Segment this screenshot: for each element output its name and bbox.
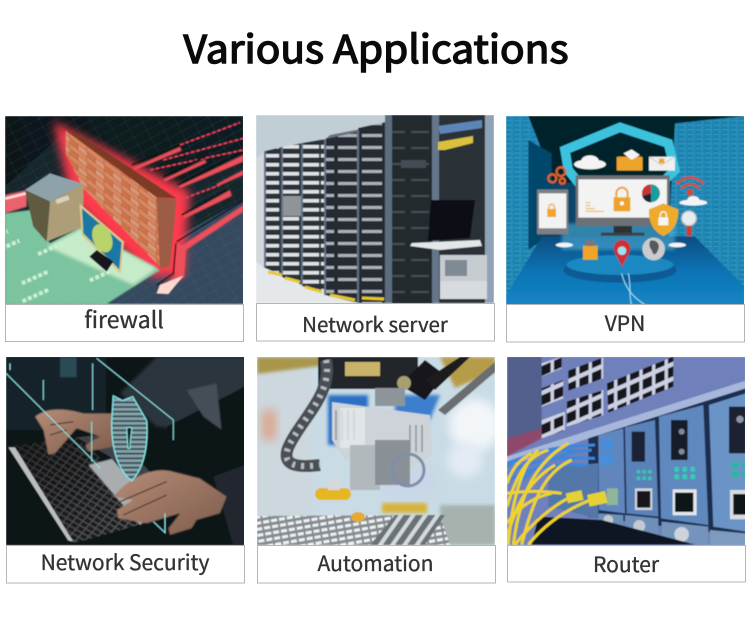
tablet — [537, 189, 568, 234]
network server caption — [256, 304, 494, 341]
brick wall — [66, 131, 160, 267]
automation caption — [258, 546, 496, 583]
network security caption: Network Security — [41, 547, 209, 577]
panel: network security — [6, 357, 245, 583]
shield outline — [565, 127, 675, 187]
monitor — [79, 203, 124, 274]
port blocks — [542, 357, 562, 377]
firewall caption: firewall — [84, 301, 164, 335]
router caption — [508, 546, 746, 582]
automation caption: Automation — [318, 548, 433, 578]
cable — [287, 360, 327, 466]
robot body — [332, 402, 432, 468]
gold shield — [649, 203, 678, 236]
dark base — [532, 517, 695, 545]
firewall caption — [6, 301, 244, 342]
VPN caption: VPN — [605, 308, 645, 338]
gripper — [315, 488, 351, 500]
panel: firewall — [0, 116, 244, 342]
connectors — [632, 432, 645, 462]
panel: VPN — [506, 116, 745, 342]
conveyor — [257, 515, 450, 545]
red arrows — [133, 147, 243, 293]
VPN image — [506, 116, 745, 305]
network server image — [256, 115, 494, 308]
network server caption: Network server — [302, 308, 448, 338]
holographic lines — [6, 358, 173, 533]
router image — [507, 357, 747, 545]
network security caption — [6, 546, 244, 583]
yellow fibres — [507, 443, 595, 545]
modules — [588, 388, 746, 537]
blue fibres — [507, 445, 595, 490]
holographic shield — [112, 396, 147, 481]
clouds, folder, mail — [574, 159, 606, 169]
top mechanism — [318, 357, 418, 389]
lower modules behind cables — [548, 463, 598, 518]
hands — [35, 409, 113, 455]
firewall image — [0, 116, 244, 309]
laptop — [8, 436, 143, 543]
panel: network server — [256, 115, 494, 341]
glow behind wall — [53, 122, 190, 277]
panel: automation — [257, 357, 501, 583]
blue accent — [328, 395, 368, 445]
gears — [548, 167, 565, 184]
RJ45 sockets — [635, 488, 652, 510]
LEDs — [637, 472, 653, 478]
magnifier — [682, 211, 696, 226]
usb, pin, globe — [583, 246, 598, 260]
automation image — [257, 357, 501, 545]
monitor — [576, 175, 670, 226]
title: Various Applications — [184, 19, 568, 75]
green floor — [5, 210, 160, 304]
VPN caption — [506, 304, 744, 342]
panel: router — [507, 357, 747, 582]
router caption: Router — [593, 549, 660, 579]
server box — [25, 173, 83, 202]
wifi — [677, 177, 704, 189]
network security image — [6, 357, 245, 545]
